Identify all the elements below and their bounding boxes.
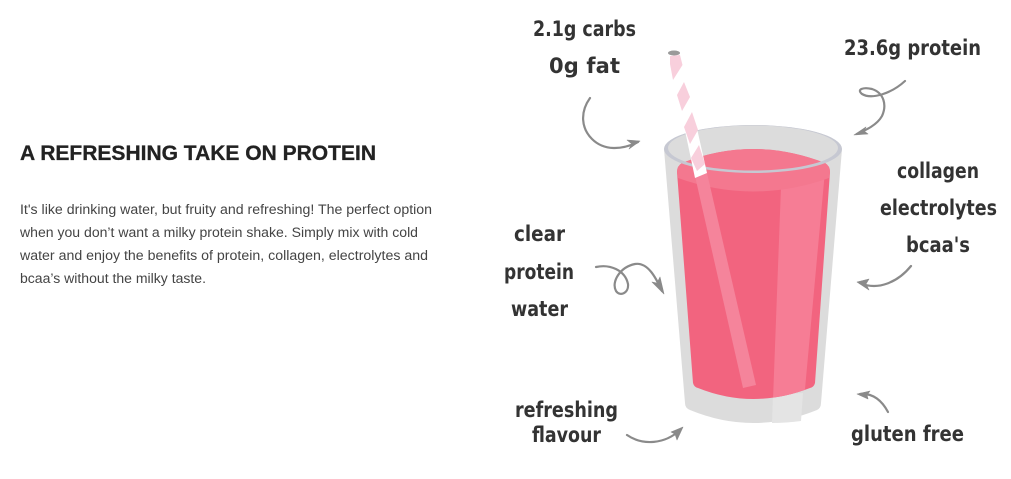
label: collagen electrolytes bcaa's: collagen bbox=[897, 159, 979, 183]
body text bbox=[19, 202, 432, 286]
glass base highlight bbox=[772, 393, 803, 423]
liquid highlight bbox=[773, 160, 826, 400]
label: carbs and fat bbox=[533, 17, 636, 78]
label: gluten free: gluten free bbox=[851, 422, 964, 446]
body text: It's like drinking water, but fruity and refreshing! The perfect option bbox=[20, 202, 432, 217]
heading: A REFRESHING TAKE ON PROTEIN bbox=[20, 142, 376, 165]
straw bbox=[668, 50, 756, 388]
body text: bcaa’s without the milky taste. bbox=[20, 271, 206, 286]
label: collagen electrolytes bcaa's: bcaa's bbox=[906, 233, 970, 257]
label: collagen electrolytes bcaa's bbox=[880, 159, 997, 257]
label: carbs and fat: 2.1g carbs bbox=[533, 17, 636, 41]
arrow: clear bbox=[596, 264, 664, 294]
label: refreshing flavour: flavour bbox=[532, 423, 602, 447]
illustration: glass of pink protein water bbox=[664, 50, 842, 423]
arrow: carbs bbox=[583, 98, 640, 149]
arrow: protein bbox=[854, 81, 905, 135]
glass body bbox=[664, 125, 842, 423]
arrow: flavour bbox=[627, 427, 683, 442]
label: protein: 23.6g protein bbox=[844, 36, 981, 60]
label: refreshing flavour: refreshing bbox=[515, 398, 618, 422]
straw top bbox=[668, 50, 680, 56]
liquid surface bbox=[677, 149, 830, 192]
label: clear protein water bbox=[504, 222, 574, 321]
label: refreshing flavour bbox=[515, 398, 618, 447]
body text: water and enjoy the benefits of protein, collagen, electrolytes and bbox=[19, 248, 428, 263]
arrow: gluten free bbox=[857, 391, 888, 412]
straw stripes bbox=[670, 55, 705, 171]
body text: when you don’t want a milky protein shake. Simply mix with cold bbox=[19, 225, 418, 240]
arrow: collagen bbox=[857, 266, 911, 290]
straw upper white bbox=[669, 53, 707, 178]
label: clear protein water: protein bbox=[504, 260, 574, 284]
label: carbs and fat: 0g fat bbox=[549, 54, 620, 78]
glass rim bbox=[664, 125, 842, 173]
liquid bbox=[677, 149, 830, 399]
label: clear protein water: water bbox=[511, 297, 569, 321]
straw submerged bbox=[695, 173, 756, 388]
label: clear protein water: clear bbox=[514, 222, 566, 246]
